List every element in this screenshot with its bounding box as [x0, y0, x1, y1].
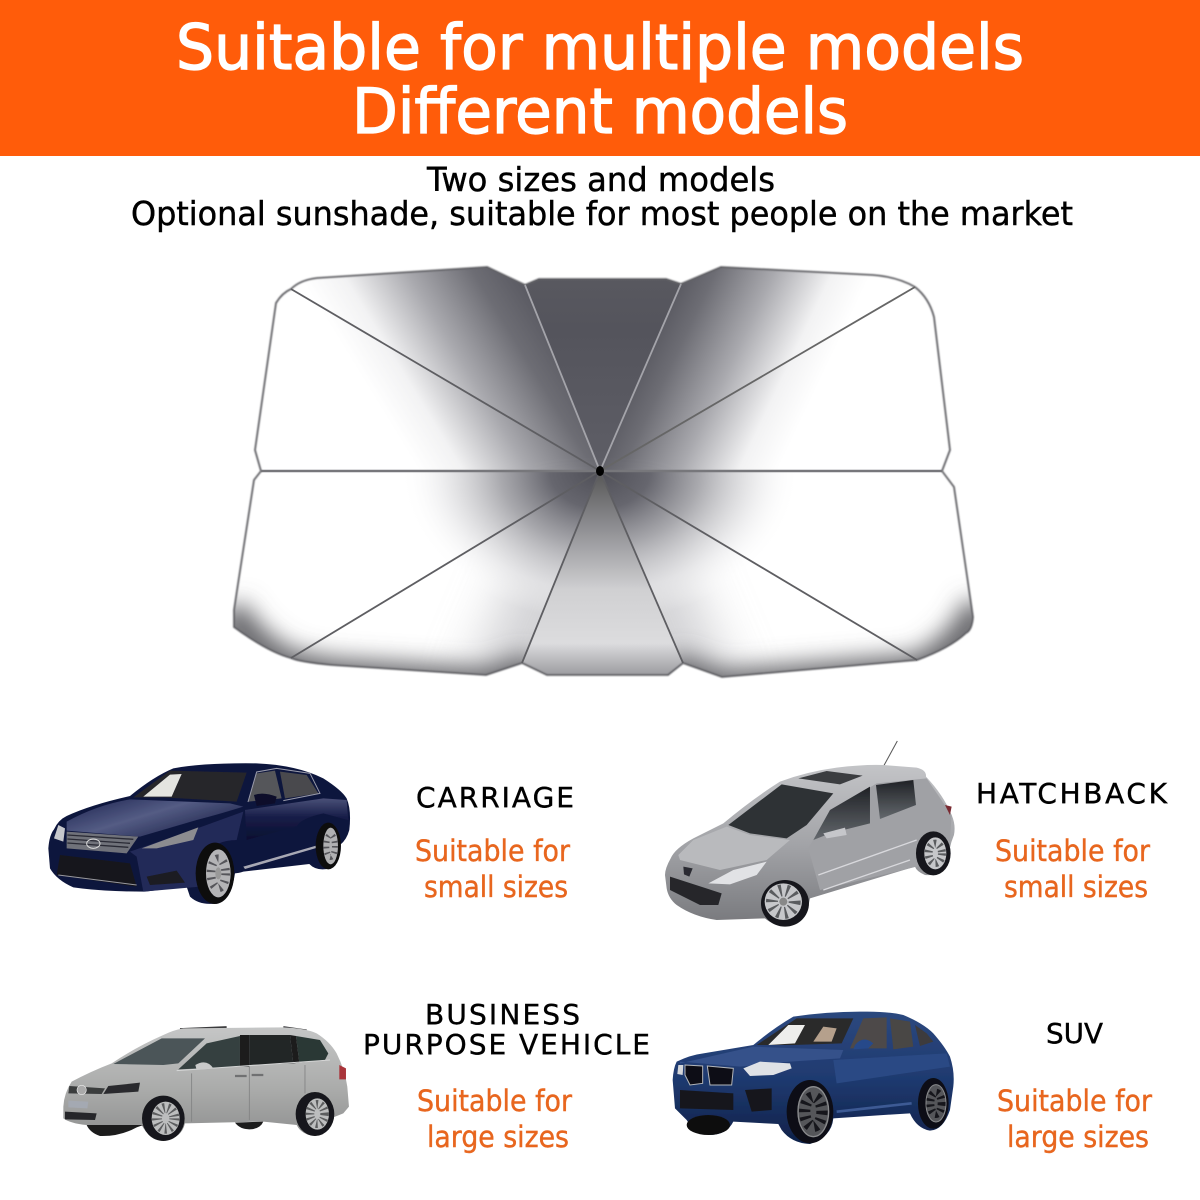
- label: hatchback: Suitable for: [995, 834, 1150, 868]
- label: business purpose vehicle: large sizes: [427, 1120, 569, 1154]
- label: suv: [997, 1017, 1152, 1154]
- hatchback wheels: [761, 831, 951, 927]
- sunshade outline: [234, 267, 973, 677]
- van grille: [68, 1086, 105, 1094]
- label: carriage: CARRIAGE: [416, 781, 574, 814]
- sunshade hub: [596, 466, 604, 476]
- car: business purpose vehicle: [63, 1027, 349, 1141]
- label: hatchback: HATCHBACK: [976, 777, 1168, 810]
- label: hatchback: [976, 777, 1168, 904]
- label: hatchback: small sizes: [1004, 870, 1148, 904]
- car: hatchback: [665, 741, 955, 927]
- label: suv: large sizes: [1007, 1120, 1149, 1154]
- label: business purpose vehicle: PURPOSE VEHICLE: [363, 1028, 650, 1061]
- subtitle text: Optional sunshade, suitable for most people on the market: [131, 194, 1073, 233]
- label: business purpose vehicle: BUSINESS: [425, 998, 580, 1031]
- label: carriage: small sizes: [424, 870, 568, 904]
- hatchback grille: [670, 877, 722, 905]
- suv grille: [685, 1065, 703, 1085]
- suv wheels: [687, 1078, 949, 1143]
- van wheels: [142, 1092, 334, 1141]
- suv headlight: [743, 1062, 792, 1076]
- van headlight: [103, 1083, 140, 1094]
- sedan wheels: [196, 823, 341, 904]
- car: sedan: [48, 763, 350, 904]
- sunshade ribs: [261, 284, 942, 663]
- car: suv: [673, 1012, 954, 1144]
- sedan grille: [67, 832, 138, 853]
- label: carriage: [415, 781, 574, 904]
- subtitle text: [131, 160, 1073, 233]
- label: business purpose vehicle: Suitable for: [417, 1084, 572, 1118]
- label: suv: SUV: [1046, 1017, 1103, 1050]
- title line 2: Different models: [352, 75, 848, 148]
- label: carriage: Suitable for: [415, 834, 570, 868]
- label: suv: Suitable for: [997, 1084, 1152, 1118]
- hatchback headlight: [708, 862, 767, 884]
- sedan headlight: [142, 827, 198, 848]
- sunshade umbrella: [232, 265, 975, 679]
- header banner: [0, 0, 1200, 156]
- subtitle text: Two sizes and models: [426, 160, 775, 199]
- label: business purpose vehicle: [363, 998, 650, 1154]
- title line 1: Suitable for multiple models: [176, 11, 1024, 84]
